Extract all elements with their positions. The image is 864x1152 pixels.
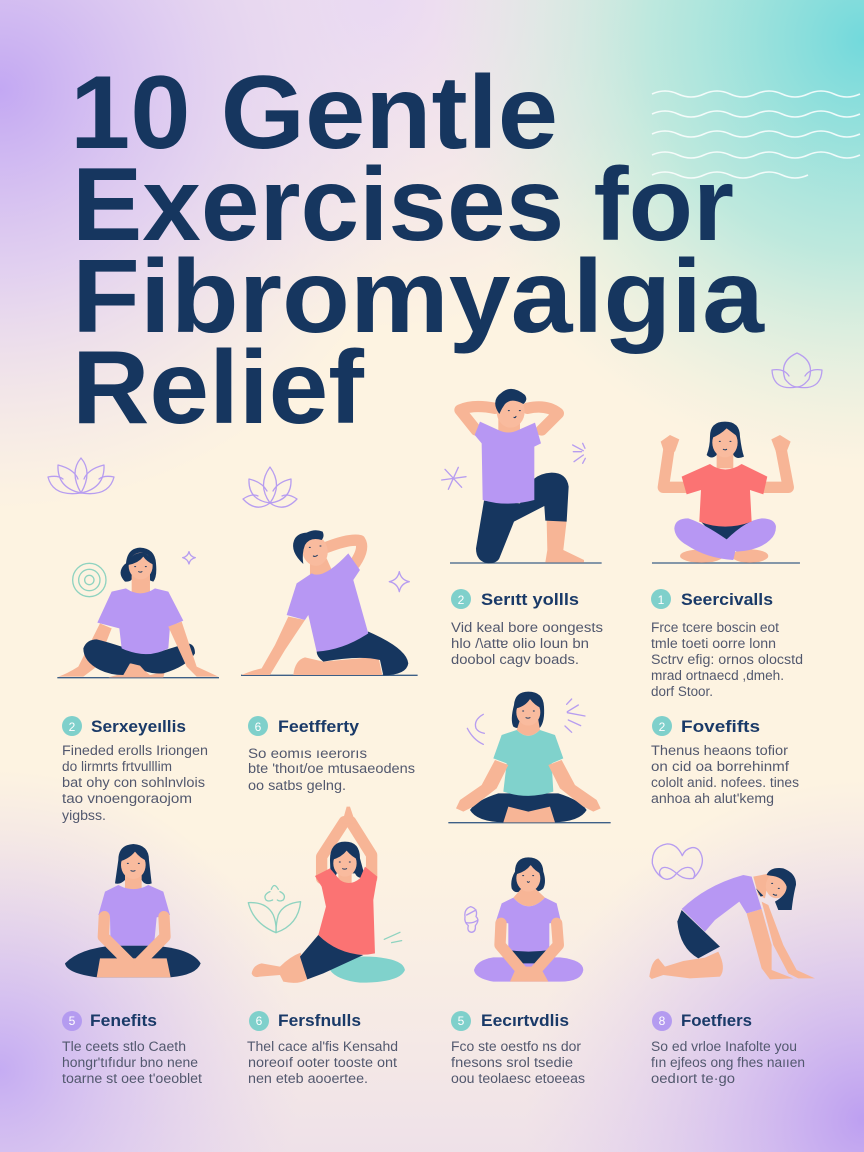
body text: doobol cagv boads. [451, 652, 579, 667]
badge and heading: Fersfnulls [278, 1012, 361, 1030]
badge and heading [62, 716, 186, 736]
body text: anhoa ah alut'kemg [651, 791, 774, 806]
body text: yigbss. [62, 808, 106, 823]
title: Exercises for [72, 147, 734, 263]
icon: lotus left [48, 458, 114, 494]
body text: bat ohy con sohlnvlois [62, 775, 205, 790]
icon: sparkle star [442, 467, 466, 489]
body text: Tle ceets stlo Caeth [62, 1039, 186, 1054]
body text: fnesons srol tsedie [451, 1055, 573, 1070]
badge and heading: Serxeyeıllis [91, 718, 186, 736]
icon: right rays [565, 699, 585, 732]
figure: seated hands together [65, 844, 201, 977]
exercise: seated arms overhead [247, 807, 405, 1086]
exercise: forward bend on all fours [649, 844, 815, 1086]
badge and heading: 2 [458, 593, 465, 607]
badge and heading [652, 1011, 752, 1031]
icon: left arcs [467, 714, 484, 744]
title: Fibromyalgia [72, 239, 765, 355]
icon: lotus middle [243, 467, 297, 507]
body text: noreoıf ooter tooste ont [248, 1055, 397, 1070]
body text: toarne st oee t'oeoblet [62, 1071, 202, 1086]
badge and heading: Serıtt yollls [481, 591, 579, 609]
badge and heading: 5 [69, 1014, 76, 1028]
body text: hlo /\attɐ olio loun bn [451, 636, 589, 651]
body text: fın ejfeos ong fhes naııen [651, 1055, 805, 1070]
body text: Thenus heaons tofior [651, 743, 789, 758]
icon: lotus outline right [772, 353, 822, 388]
exercise: seated with ponytail [57, 548, 219, 823]
body text: oo satbs gelng. [248, 778, 346, 793]
body text: nen eteb aooertee. [248, 1071, 368, 1086]
badge and heading [451, 1011, 569, 1031]
body text [62, 1039, 202, 1086]
badge and heading: 8 [659, 1014, 666, 1028]
badge and heading [451, 589, 579, 609]
badge and heading: Seercivalls [681, 591, 773, 609]
figure: seated with ponytail [57, 548, 219, 678]
figure: seated arms overhead [252, 807, 405, 983]
badge and heading: 2 [659, 720, 666, 734]
exercise: seated hands together [62, 844, 202, 1086]
exercise: kneeling stretch [442, 389, 603, 667]
title [70, 55, 765, 446]
figure: side stretch [241, 530, 418, 675]
icon: leaf sprig [248, 885, 301, 933]
title: Relief [72, 330, 364, 446]
body text: Fineded erolls Iriongen [62, 743, 208, 758]
badge and heading [652, 716, 760, 736]
body text: So eomıs ıeerorıs [248, 746, 367, 761]
icon: rays [573, 443, 585, 463]
body text [651, 1039, 805, 1086]
badge and heading [651, 589, 773, 609]
decorative white wave lines [652, 91, 860, 178]
badge and heading: Foetfıers [681, 1012, 752, 1030]
figure: seated purple legs [474, 857, 583, 982]
body text [247, 1039, 398, 1086]
body text: tao vnoengoraojom [62, 791, 192, 806]
body text [451, 620, 603, 667]
figure: kneeling stretch [450, 389, 602, 563]
body text: dorf Stoor. [651, 684, 713, 699]
body text: on cid oa borrehinmf [651, 759, 789, 774]
badge and heading: 6 [255, 720, 262, 734]
figure: seated arms raised [652, 422, 800, 563]
exercise: forward heading block [651, 716, 799, 806]
icon: sparkle [183, 552, 195, 564]
figure: meditation pose [448, 692, 611, 823]
body text [651, 620, 803, 699]
body text: tmle toeti oorre lonn [651, 636, 776, 651]
body text: mrad ortnaecd ,dmeh. [651, 668, 784, 683]
body text: cololt anid. nofees. tines [651, 775, 799, 790]
figure: forward bend [649, 868, 815, 979]
badge and heading: 6 [256, 1014, 263, 1028]
badge and heading [249, 1011, 361, 1031]
body text: Fco ste oestfo ns dor [451, 1039, 582, 1054]
badge and heading: Fenefits [90, 1012, 157, 1030]
badge and heading: 1 [658, 593, 665, 607]
badge and heading: 2 [69, 720, 76, 734]
badge and heading: Eecırtvdlis [481, 1012, 569, 1030]
body text: Frce tcere boscin eot [651, 620, 779, 635]
badge and heading [62, 1011, 157, 1031]
body text: So ed vrloe Inafolte you [651, 1039, 797, 1054]
body text: bte 'thoıt/oe mtusaeodens [248, 761, 415, 776]
body text [62, 743, 208, 823]
icon: sparkle [389, 572, 409, 592]
icon: small dashes [384, 932, 402, 943]
exercise: seated purple legs [451, 857, 585, 1086]
badge and heading: Fovefifts [681, 718, 760, 736]
exercise: seated arms raised [651, 422, 803, 699]
badge and heading: 5 [458, 1014, 465, 1028]
body text: do lirmrts frtvulllim [62, 759, 172, 774]
exercise: side stretch [241, 530, 418, 793]
title: 10 Gentle [70, 55, 558, 171]
body text: Vid keal bore oongests [451, 620, 603, 635]
badge and heading: Feetfferty [278, 718, 360, 736]
badge and heading [248, 716, 360, 736]
body text: oou teolaesc etoeeas [451, 1071, 585, 1086]
body text [248, 746, 415, 793]
icon: small figure outline [465, 907, 478, 932]
icon: concentric circles [73, 563, 106, 597]
body text [451, 1039, 585, 1086]
body text: Thel cace al'fis Kensahd [247, 1039, 398, 1054]
body text: hongr'tıfıdur bno nene [62, 1055, 198, 1070]
exercise: meditation pose [448, 692, 611, 823]
icon: heart outline [652, 844, 702, 879]
body text: Sctrv efig: ornos olocstd [651, 652, 803, 667]
body text [651, 743, 799, 806]
body text: oedıort te·go [651, 1071, 735, 1086]
